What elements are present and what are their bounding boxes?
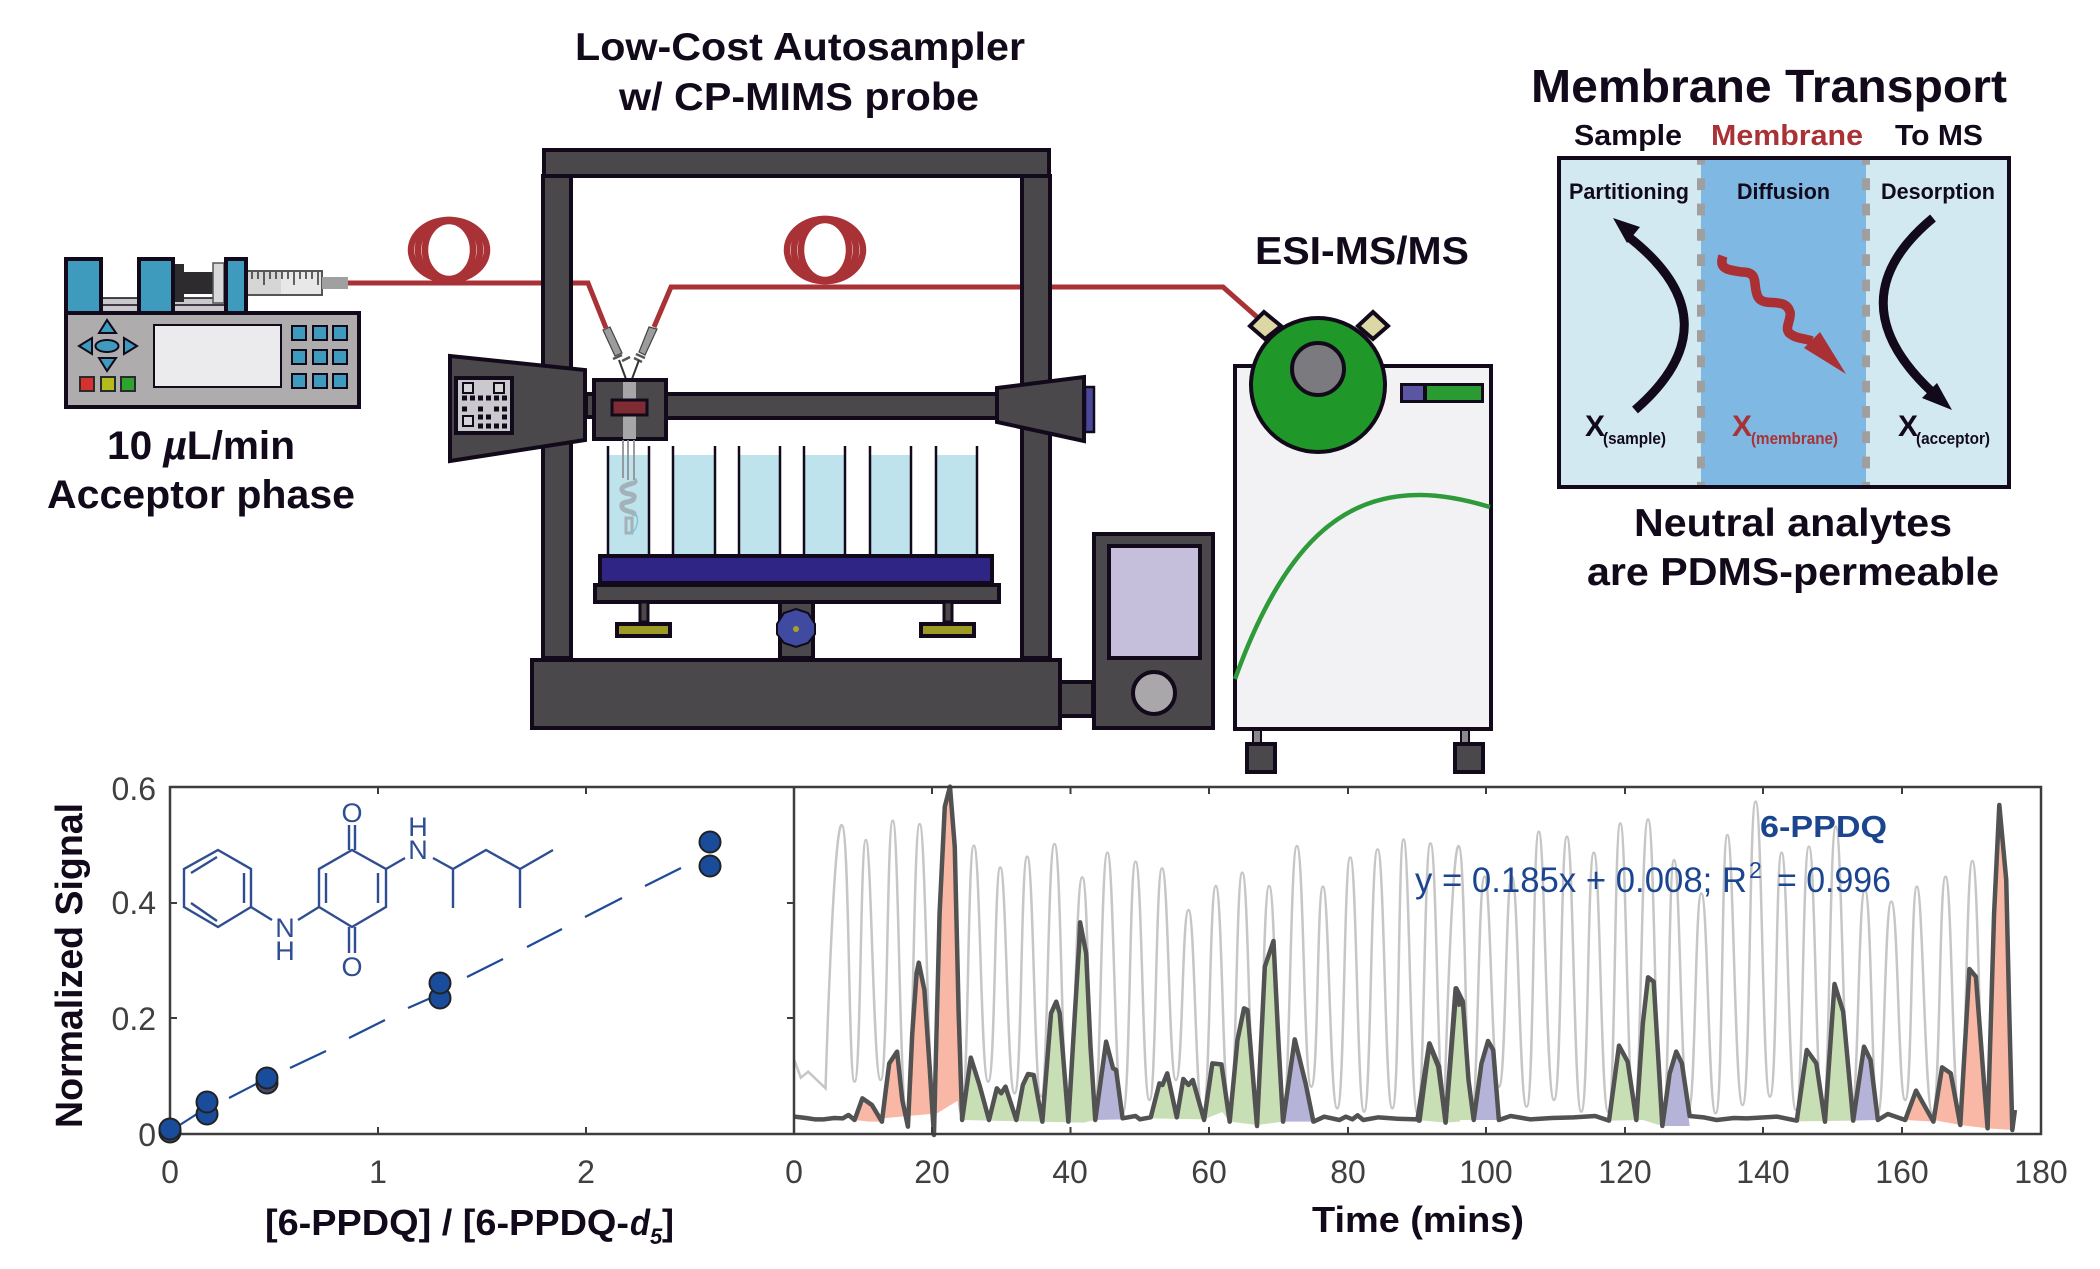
- title: low-cost autosampler: [575, 26, 1025, 119]
- annotation: regression equation: 2: [1749, 857, 1762, 883]
- arrow: partitioning: [1613, 218, 1684, 410]
- equilibrium labels: X: [1585, 410, 1605, 443]
- x axis title: calibration: 5: [650, 1224, 663, 1249]
- calibration plot: data points: [160, 832, 720, 1142]
- x axis tick labels: 140: [1736, 1154, 1790, 1190]
- title: low-cost autosampler: w/ CP-MIMS probe: [618, 76, 979, 119]
- label: flow rate and acceptor phase: 10 µL/min: [107, 424, 295, 468]
- x axis tick labels: 80: [1330, 1154, 1366, 1190]
- y axis tick labels: 0.4: [112, 885, 156, 921]
- controller box: [1094, 534, 1213, 728]
- annotation: regression equation: [1415, 857, 1891, 900]
- arrow: diffusion: [1722, 256, 1846, 374]
- gray internal standard trace: [794, 802, 2014, 1123]
- x axis title: calibration: ]: [662, 1202, 674, 1243]
- structure: 6-PPDQ molecule: [184, 798, 553, 982]
- membrane layer: [1701, 158, 1866, 487]
- caption: neutral analytes: are PDMS-permeable: [1587, 551, 1999, 594]
- sample vials: [608, 446, 977, 556]
- vial tray: [600, 556, 992, 583]
- label: flow rate and acceptor phase: Acceptor phase: [47, 473, 355, 517]
- step labels: [1569, 179, 1995, 204]
- tubing: red capillary line with coils: [348, 219, 1257, 328]
- x axis tick labels: 20: [914, 1154, 950, 1190]
- left gantry motor with QR panel: [450, 356, 585, 461]
- chart frame and tick marks: [170, 787, 2041, 1134]
- probe fittings and needles: [603, 327, 657, 379]
- MS status indicator: [1400, 383, 1484, 403]
- syringe barrel: [246, 271, 348, 295]
- equilibrium labels: (acceptor): [1916, 429, 1990, 448]
- ESI source: [1251, 318, 1385, 452]
- structure: 6-PPDQ molecule: O: [341, 798, 363, 828]
- structure: 6-PPDQ molecule: H: [275, 936, 295, 966]
- column headings: sample, membrane, to MS: [1574, 120, 1983, 152]
- x axis tick labels: 60: [1191, 1154, 1227, 1190]
- y axis title: Normalized Signal: [49, 803, 91, 1128]
- right gantry motor: [997, 377, 1094, 441]
- equilibrium labels: (membrane): [1751, 429, 1838, 448]
- arrow: desorption: [1883, 218, 1952, 410]
- probe holder block: [594, 380, 666, 439]
- panel: membrane transport diagram: [1559, 158, 2009, 487]
- x axis tick labels: 180: [2014, 1154, 2068, 1190]
- x axis tick labels: 1: [369, 1154, 387, 1190]
- heading: membrane transport: Membrane Transport: [1531, 60, 2007, 112]
- title: low-cost autosampler: Low-Cost Autosampler: [575, 26, 1025, 69]
- equilibrium labels: X: [1732, 410, 1752, 443]
- MS feet: [1247, 730, 1483, 772]
- structure: 6-PPDQ molecule: H: [408, 812, 428, 842]
- syringe plunger: [174, 263, 224, 303]
- pump body: [66, 313, 359, 407]
- x axis title: calibration: d: [630, 1202, 651, 1243]
- calibration plot: dashed fit line: [172, 868, 681, 1130]
- caption: neutral analytes: Neutral analytes: [1634, 502, 1952, 545]
- y axis tick labels: 0.2: [112, 1001, 156, 1037]
- column headings: sample, membrane, to MS: Sample: [1574, 120, 1682, 152]
- stage plate with feet and knob: [595, 585, 999, 647]
- pump status lights: [80, 377, 135, 391]
- autosampler frame: [532, 150, 1093, 728]
- chart: chromatogram time trace: [794, 787, 2015, 1135]
- x axis tick labels: [161, 1154, 2068, 1190]
- pump screen: [154, 325, 281, 387]
- x axis tick labels: 120: [1598, 1154, 1652, 1190]
- x axis tick labels: 40: [1052, 1154, 1088, 1190]
- step labels: Partitioning: [1569, 179, 1689, 204]
- CP-MIMS probe in vial: [622, 440, 637, 534]
- y axis tick labels: 0: [138, 1117, 156, 1153]
- MS cabinet: [1235, 366, 1491, 729]
- annotation: compound name: 6-PPDQ: [1760, 809, 1887, 844]
- equilibrium labels: (sample): [1603, 429, 1666, 448]
- equilibrium labels: X: [1898, 410, 1918, 443]
- pump clamps: [66, 259, 246, 313]
- pump navigation keys: [79, 320, 137, 371]
- membrane boundaries: [1701, 160, 1866, 487]
- MS signal curve: [1235, 495, 1490, 679]
- dark analyte trace: [794, 787, 2015, 1135]
- label: ESI-MS/MS: ESI-MS/MS: [1255, 230, 1469, 273]
- x axis tick labels: 160: [1875, 1154, 1929, 1190]
- annotation: regression equation: = 0.996: [1777, 861, 1891, 900]
- pump keypad: [292, 326, 347, 388]
- column headings: sample, membrane, to MS: To MS: [1895, 120, 1983, 152]
- structure: 6-PPDQ molecule: N: [408, 835, 428, 865]
- x axis title: calibration: [6-PPDQ] / [6-PPDQ-: [265, 1202, 629, 1243]
- equilibrium labels: [1585, 410, 1990, 448]
- colored peak fills, first half: [855, 787, 1460, 1135]
- y axis tick labels: [112, 771, 156, 1153]
- step labels: Diffusion: [1737, 179, 1830, 204]
- x axis tick labels: 2: [577, 1154, 595, 1190]
- step labels: Desorption: [1881, 179, 1995, 204]
- x axis tick labels: 100: [1459, 1154, 1513, 1190]
- colored peak fills, second half: [1420, 805, 2012, 1130]
- y axis tick labels: 0.6: [112, 771, 156, 807]
- MS inlet fittings: [1250, 312, 1388, 339]
- pump rods: [100, 298, 230, 312]
- mass spectrometer: [1235, 312, 1491, 772]
- structure: 6-PPDQ molecule: O: [341, 952, 363, 982]
- x axis title: time: Time (mins): [1312, 1199, 1524, 1240]
- x axis tick labels: 0: [785, 1154, 803, 1190]
- structure: 6-PPDQ molecule: N: [275, 913, 295, 943]
- caption: neutral analytes: [1587, 502, 1999, 594]
- x axis tick labels: 0: [161, 1154, 179, 1190]
- horizontal gantry rail: [586, 394, 998, 418]
- column headings: sample, membrane, to MS: Membrane: [1711, 120, 1863, 152]
- label: flow rate and acceptor phase: [47, 424, 355, 517]
- syringe pump: [66, 259, 359, 407]
- annotation: regression equation: y = 0.185x + 0.008; R: [1415, 861, 1747, 900]
